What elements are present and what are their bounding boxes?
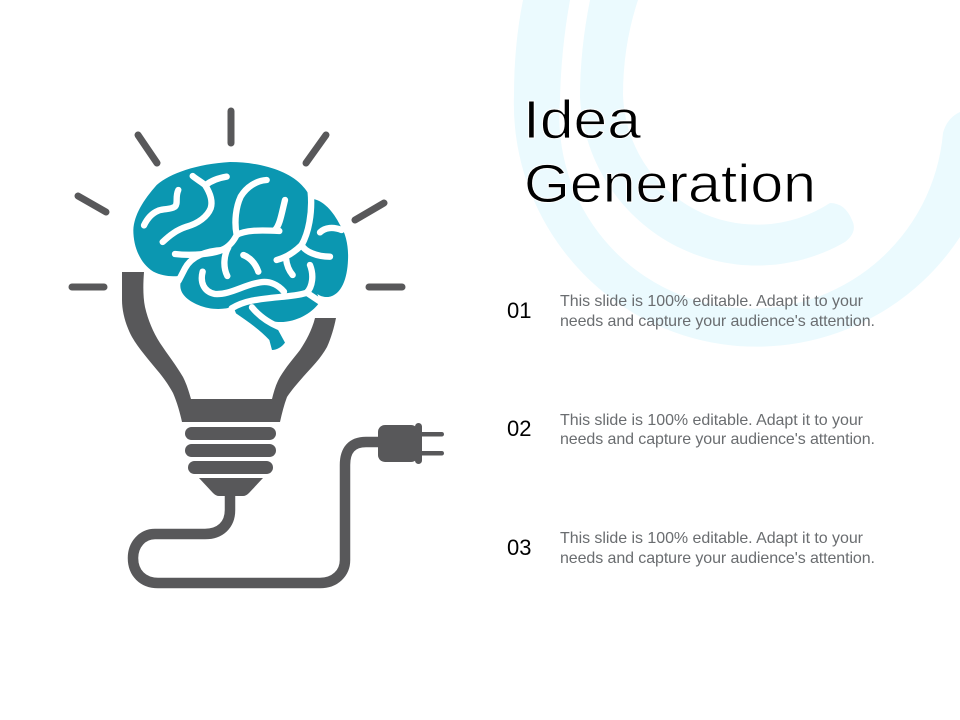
brain — [133, 162, 348, 350]
item 01 — [507, 293, 875, 330]
power cord — [133, 442, 382, 583]
bulb screw base — [185, 427, 276, 496]
item 03: This slide is 100% editable. Adapt it to your — [560, 530, 864, 547]
background swirl — [514, 0, 960, 347]
item 02: needs and capture your audience's attention. — [560, 431, 875, 448]
title: Generation — [524, 154, 816, 214]
icon: light bulb with brain — [72, 111, 444, 583]
item 02: 02 — [507, 416, 531, 441]
light rays — [72, 111, 402, 287]
item 01: This slide is 100% editable. Adapt it to your — [560, 293, 864, 310]
item 03: needs and capture your audience's attention. — [560, 550, 875, 567]
bulb glass outline — [122, 272, 336, 422]
item 01: 01 — [507, 298, 531, 323]
item 02 — [507, 412, 875, 448]
title — [523, 90, 816, 214]
title: Idea — [523, 90, 642, 150]
item 03: 03 — [507, 535, 531, 560]
item 02: This slide is 100% editable. Adapt it to your — [560, 412, 864, 429]
item 01: needs and capture your audience's attention. — [560, 313, 875, 330]
item 03 — [507, 530, 875, 567]
plug — [378, 423, 444, 464]
